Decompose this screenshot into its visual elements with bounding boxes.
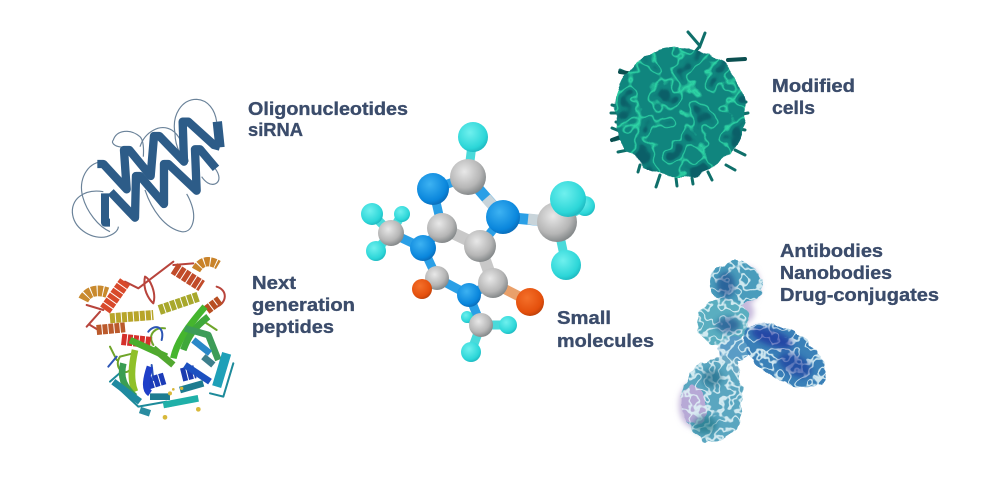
dark patches xyxy=(693,272,816,434)
beta strands xyxy=(113,307,227,413)
label: antibodies: Antibodies xyxy=(780,240,883,261)
label: peptides: peptides xyxy=(252,316,334,337)
lilac halos xyxy=(679,267,760,427)
illustration: antibody xyxy=(679,261,837,442)
helices xyxy=(83,262,220,383)
illustration: peptide ribbon xyxy=(83,262,233,420)
label: small molecules: Small xyxy=(557,307,611,328)
label: antibodies: Drug-conjugates xyxy=(780,284,939,305)
label: peptides: generation xyxy=(252,294,355,315)
thin loops xyxy=(87,262,233,407)
label: antibodies: Nanobodies xyxy=(780,262,892,283)
label: oligonucleotides xyxy=(248,98,408,140)
atoms xyxy=(575,196,595,216)
cell body xyxy=(615,47,745,177)
illustration: small molecule xyxy=(361,122,595,362)
thin loops xyxy=(72,99,219,237)
label: peptides xyxy=(252,272,355,337)
ribbon strands xyxy=(97,122,220,223)
label: oligonucleotides: siRNA xyxy=(248,119,303,140)
illustration: oligonucleotide helix xyxy=(72,99,220,237)
label: oligonucleotides: Oligonucleotides xyxy=(248,98,408,119)
ligands xyxy=(163,387,201,420)
label: peptides: Next xyxy=(252,272,296,293)
illustration: modified cell xyxy=(611,32,748,187)
label: small molecules: molecules xyxy=(557,330,654,351)
label: antibodies xyxy=(780,240,939,305)
label: modified cells: Modified xyxy=(772,75,855,96)
label: modified cells: cells xyxy=(772,97,815,118)
label: small molecules xyxy=(557,307,654,351)
bonds xyxy=(372,137,585,352)
label: modified cells xyxy=(772,75,855,118)
lobes xyxy=(682,261,837,442)
spikes xyxy=(611,32,748,187)
